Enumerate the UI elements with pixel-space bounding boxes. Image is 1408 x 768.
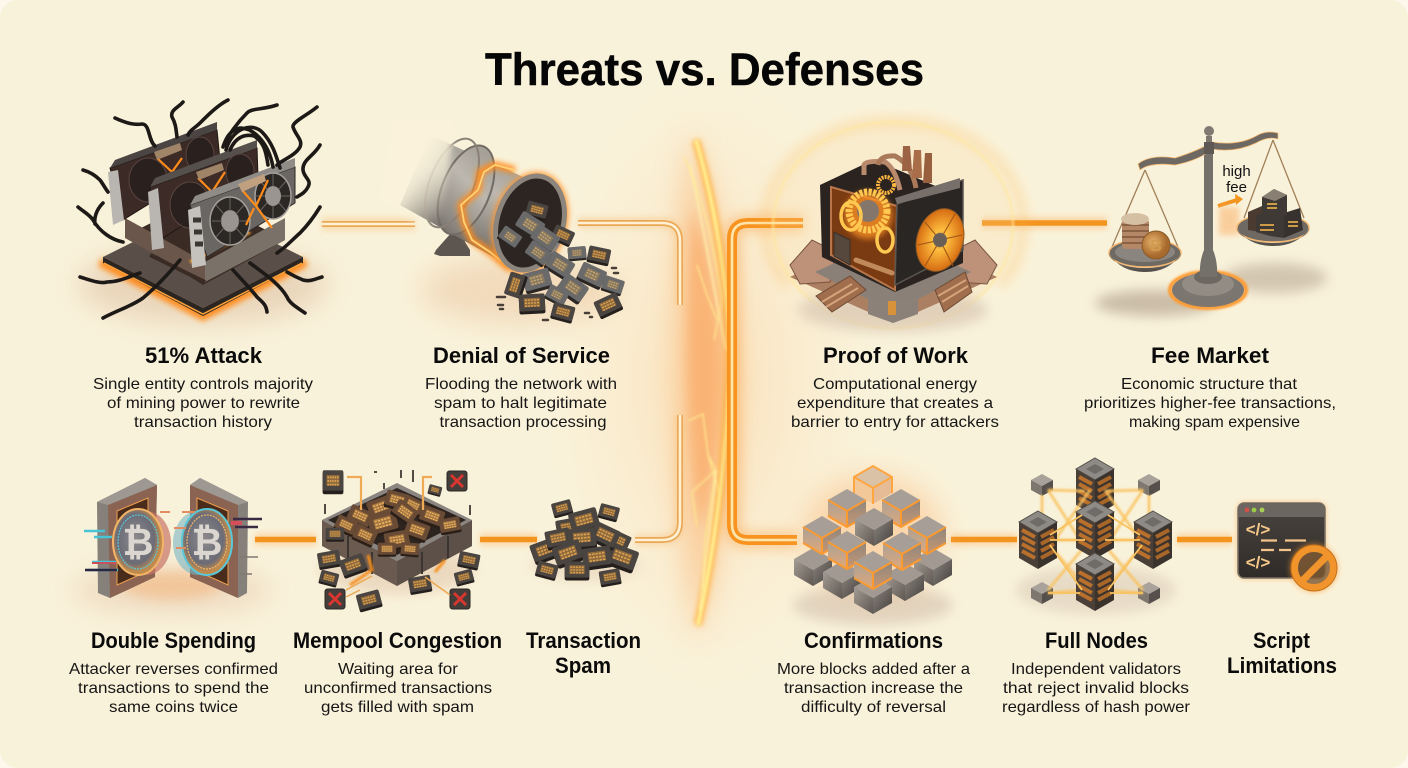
panel: Full Nodes: [1002, 458, 1191, 716]
description: [93, 376, 313, 431]
description: Economic structure that: [1121, 376, 1298, 393]
description: transaction processing: [440, 414, 606, 431]
description: transactions to spend the: [78, 680, 269, 697]
heading: [526, 628, 641, 678]
scale label: [1222, 163, 1251, 196]
heading: Proof of Work: [823, 343, 969, 368]
connector: Full Nodes to Script Limitations: [1177, 534, 1232, 546]
description: of mining power to rewrite: [107, 395, 300, 412]
description: Waiting area for: [338, 661, 459, 678]
heading: 51% Attack: [145, 343, 263, 368]
connector: Double Spending to Mempool: [255, 534, 316, 546]
heading: Script: [1253, 628, 1311, 653]
scale label: high: [1222, 163, 1251, 180]
description: [1002, 661, 1191, 716]
description: making spam expensive: [1129, 414, 1300, 431]
icon: GPU mining rig with tentacles: [78, 100, 328, 323]
icon: mirrored bitcoin coins in frames: ₿: [123, 520, 153, 564]
description: [1084, 376, 1336, 431]
description: Computational energy: [813, 376, 977, 393]
description: barrier to entry for attackers: [791, 414, 999, 431]
heading: [1227, 628, 1337, 678]
connector: 51% Attack to Denial of Service: [322, 217, 415, 231]
description: unconfirmed transactions: [304, 680, 492, 697]
description: [777, 661, 970, 716]
description: Flooding the network with: [425, 376, 617, 393]
icon: pile of spam transactions: [529, 499, 640, 587]
connector: Confirmations to Full Nodes: [951, 534, 1017, 546]
connector: Transaction Spam into barrier: [635, 415, 680, 540]
connector: Proof of Work to Fee Market: [982, 217, 1107, 229]
heading: Mempool Congestion: [293, 628, 502, 653]
description: Independent validators: [1011, 661, 1181, 678]
icon: code window with prohibition sign: </>: [1246, 520, 1270, 539]
panel: Transaction Spam: [526, 499, 641, 678]
heading: Confirmations: [804, 628, 943, 653]
panel: Confirmations: [777, 466, 970, 716]
panel: Mempool Congestion: [293, 470, 502, 716]
description: [304, 661, 492, 716]
description: expenditure that creates a: [797, 395, 993, 412]
panel: Proof of Work: [765, 122, 1023, 431]
icon: balance scale with high fee: [1095, 126, 1327, 316]
icon: overflowing mempool container: [317, 470, 481, 613]
icon: cracked pipe spilling chips: [380, 120, 625, 324]
heading: Denial of Service: [433, 343, 610, 368]
description: Single entity controls majority: [93, 376, 313, 393]
connector: Mempool to Transaction Spam: [480, 534, 537, 546]
description: prioritizes higher-fee transactions,: [1084, 395, 1336, 412]
scale label: fee: [1226, 179, 1247, 196]
heading: Full Nodes: [1045, 628, 1148, 653]
description: regardless of hash power: [1002, 699, 1191, 716]
panel: Script Limitations: [1227, 503, 1338, 678]
description: transaction history: [134, 414, 272, 431]
description: More blocks added after a: [777, 661, 970, 678]
description: that reject invalid blocks: [1003, 680, 1189, 697]
icon: mirrored bitcoin coins in frames: ₿: [192, 520, 222, 564]
icon: network of server nodes: [1016, 458, 1176, 614]
icon: code window with prohibition sign: </>: [1246, 553, 1270, 572]
description: difficulty of reversal: [801, 699, 946, 716]
description: [425, 376, 617, 431]
panel: Denial of Service: [380, 120, 625, 431]
connector: barrier to Proof of Work and Confirmations: [732, 223, 803, 540]
heading: Limitations: [1227, 653, 1337, 678]
heading: Double Spending: [91, 628, 256, 653]
heading: Spam: [555, 653, 611, 678]
title: Threats vs. Defenses: [485, 44, 924, 95]
icon: code window with prohibition sign: [1238, 503, 1338, 592]
description: Attacker reverses confirmed: [69, 661, 278, 678]
panel: Double Spending: [69, 478, 278, 716]
panel: Fee Market: [1084, 126, 1336, 431]
panel: 51% Attack: [78, 100, 328, 431]
heading: Transaction: [526, 628, 641, 653]
heading: Fee Market: [1151, 343, 1270, 368]
description: [791, 376, 999, 431]
icon: mirrored bitcoin coins in frames: [72, 478, 272, 612]
icon: balance scale with high fee: B: [1150, 238, 1162, 255]
description: same coins twice: [109, 699, 238, 716]
description: spam to halt legitimate: [434, 395, 607, 412]
connector: Denial of Service into barrier: [578, 223, 680, 305]
description: [69, 661, 278, 716]
icon: shielded mining machine: [765, 122, 1023, 332]
central energy barrier: [676, 130, 732, 642]
description: gets filled with spam: [321, 699, 474, 716]
description: transaction increase the: [784, 680, 963, 697]
icon: stacked glowing blocks: [793, 466, 953, 625]
